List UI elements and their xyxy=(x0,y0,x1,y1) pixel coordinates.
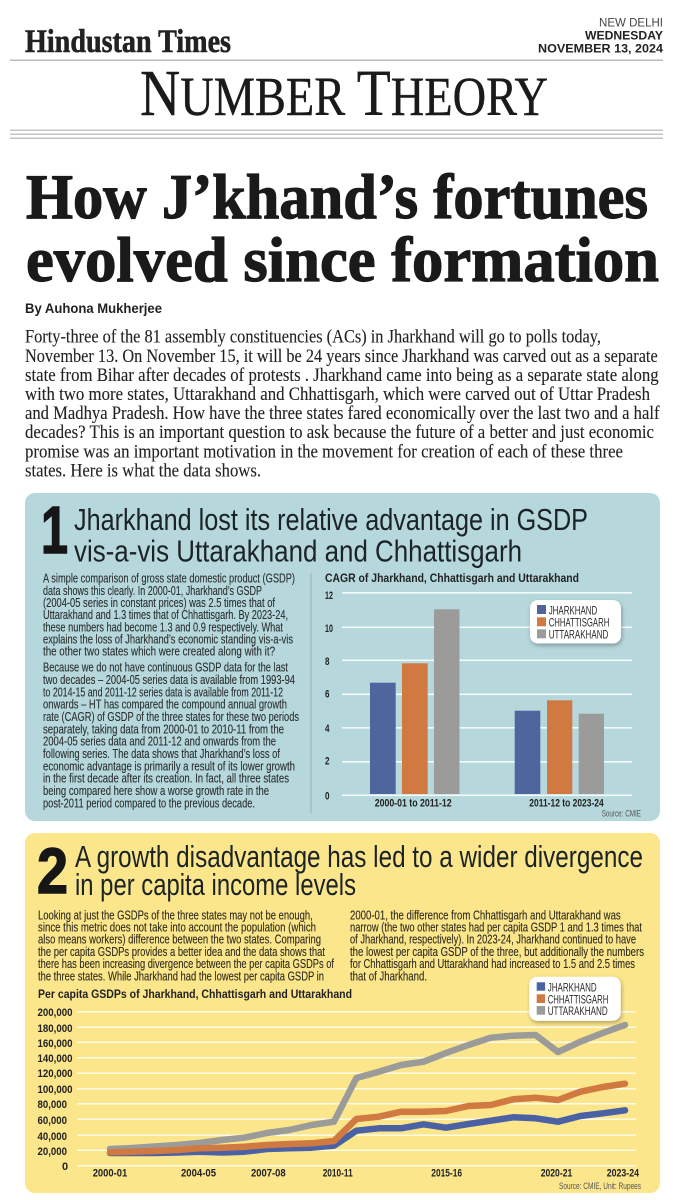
main headline xyxy=(26,161,659,295)
line chart: per capita GSDP xyxy=(38,977,641,1191)
y axis labels: 40,000 xyxy=(38,1131,67,1143)
y axis labels: 100,000 xyxy=(38,1084,72,1096)
panel 1 text: explains the loss of Jharkhand’s economic standing vis-a-vis xyxy=(43,633,293,647)
panel 1 text: Because we do not have continuous GSDP data for the last xyxy=(43,661,288,675)
panel 1 text: 2004-05 series data and 2011-12 and onwards from the xyxy=(43,735,276,749)
panel 2 text left: since this metric does not take into account the population (which xyxy=(38,920,316,934)
x axis labels: 2000-01 to 2011-12 xyxy=(375,798,452,810)
dateline: NOVEMBER 13, 2024 xyxy=(538,43,664,55)
panel 1 text: (2004-05 series in constant prices) was 2.5 times that of xyxy=(43,596,275,610)
panel 1 text: economic advantage is primarily a result of its lower growth xyxy=(43,759,295,773)
bars: 2000-01 to 2011-12 xyxy=(370,609,460,794)
y axis labels: 10 xyxy=(325,623,333,635)
x axis labels: 2023-24 xyxy=(607,1168,640,1180)
legend: UTTARAKHAND xyxy=(548,1004,608,1018)
dateline: WEDNESDAY xyxy=(585,30,663,42)
panel 2 text right xyxy=(350,908,644,983)
panel 1 text: A simple comparison of gross state domestic product (GSDP) xyxy=(43,572,295,586)
panel 2 text left: the per capita GSDPs provides a better idea and the data shows that xyxy=(38,945,325,959)
panel 1 heading: vis-a-vis Uttarakhand and Chhattisgarh xyxy=(74,534,522,569)
panel 1 text: being compared here show a worse growth rate in the xyxy=(43,784,269,798)
legend: CHHATTISGARH xyxy=(549,616,609,630)
panel 2 heading: in per capita income levels xyxy=(75,867,356,902)
y axis labels xyxy=(325,590,333,802)
intro text: promise was an important motivation in the movement for creation of each of these three xyxy=(25,442,623,462)
legend xyxy=(529,977,621,1021)
logo: Hindustan Times: Hindustan Times xyxy=(25,24,231,60)
x axis labels xyxy=(375,798,604,810)
panel 1 text: to 2014-15 and 2011-12 series data is available from 2011-12 xyxy=(43,685,283,699)
panel 1 text: post-2011 period compared to the previous decade. xyxy=(43,796,255,810)
panel 1 text: onwards – HT has compared the compound annual growth xyxy=(43,698,287,712)
panel 2 text left xyxy=(38,908,334,983)
intro text: states. Here is what the data shows. xyxy=(25,461,261,481)
y axis labels: 80,000 xyxy=(38,1099,67,1111)
y axis labels: 200,000 xyxy=(38,1007,72,1019)
x axis labels: 2010-11 xyxy=(323,1168,353,1180)
main headline: How J’khand’s fortunes xyxy=(26,161,648,232)
section title: Number Theory: NUMBER THEORY xyxy=(140,57,548,130)
panel 1 text xyxy=(43,572,299,810)
panel 1: GSDP xyxy=(25,493,660,821)
y axis labels xyxy=(38,1007,72,1173)
panel 1 text: the other two states which were created along with it? xyxy=(43,645,275,659)
numeral 2: 2 xyxy=(37,835,68,907)
panel 2 text left: also means workers) difference between the two states. Comparing xyxy=(38,933,321,947)
bars: 2011-12 to 2023-24 xyxy=(515,700,604,794)
source: Source: CMIE, Unit: Rupees xyxy=(559,1181,641,1191)
panel 1 heading xyxy=(74,502,588,569)
intro text: Forty-three of the 81 assembly constituencies (ACs) in Jharkhand will go to polls today, xyxy=(25,328,601,348)
legend: JHARKHAND xyxy=(549,603,598,617)
bar chart: CAGR xyxy=(325,573,641,819)
x axis labels: 2011-12 to 2023-24 xyxy=(529,798,604,810)
intro text xyxy=(25,328,660,481)
legend: CHHATTISGARH xyxy=(548,992,608,1006)
y axis labels: 8 xyxy=(325,656,330,668)
y axis labels: 4 xyxy=(325,723,330,735)
y axis labels: 2 xyxy=(325,756,330,768)
panel 1 text: rate (CAGR) of GSDP of the three states for these two periods xyxy=(43,710,299,724)
numeral 1: 1 xyxy=(41,493,68,568)
panel 1 text: two decades – 2004-05 series data is available from 1993-94 xyxy=(43,673,295,687)
y axis labels: 180,000 xyxy=(38,1023,72,1035)
panel 1 text: data shows this clearly. In 2000-01, Jharkhand’s GSDP xyxy=(43,584,262,598)
line chart title: Per capita GSDPs of Jharkhand, Chhattisgarh and Uttarakhand xyxy=(38,989,352,1001)
line: Jharkhand xyxy=(110,1110,625,1153)
dateline: NEW DELHI xyxy=(599,18,663,30)
bar chart title: CAGR of Jharkhand, Chhattisgarh and Uttarakhand xyxy=(325,573,579,585)
dateline xyxy=(538,18,664,55)
y axis labels: 12 xyxy=(325,590,333,602)
panel 1 background xyxy=(25,493,660,821)
main headline: evolved since formation xyxy=(26,224,659,295)
panel 1 text: separately, taking data from 2000-01 to 2010-11 from the xyxy=(43,722,284,736)
source: Source: CMIE xyxy=(602,809,641,819)
masthead xyxy=(25,18,664,60)
panel 2 text left: there has been increasing divergence between the per capita GSDPs of xyxy=(38,957,334,971)
byline: By Auhona Mukherjee xyxy=(25,300,162,316)
panel 2 background xyxy=(25,833,660,1193)
line: Chhattisgarh xyxy=(110,1084,625,1152)
y axis labels: 0 xyxy=(62,1161,68,1173)
y axis labels: 0 xyxy=(325,790,330,802)
x axis labels: 2000-01 xyxy=(93,1168,127,1180)
panel 2 text right: that of Jharkhand. xyxy=(350,969,427,983)
x axis labels xyxy=(93,1168,640,1180)
x axis labels: 2020-21 xyxy=(541,1168,572,1180)
y axis labels: 140,000 xyxy=(38,1053,72,1065)
panel 1 text: in the first decade after its creation. In fact, all three states xyxy=(43,772,289,786)
x axis labels: 2004-05 xyxy=(181,1168,216,1180)
y axis labels: 120,000 xyxy=(38,1068,72,1080)
legend: JHARKHAND xyxy=(548,981,597,995)
y axis labels: 20,000 xyxy=(38,1146,67,1158)
y axis labels: 6 xyxy=(325,688,330,700)
panel 2 text left: the three states. While Jharkhand had the lowest per capita GSDP in xyxy=(38,969,324,983)
panel 2 heading xyxy=(75,839,643,902)
x axis labels: 2007-08 xyxy=(251,1168,286,1180)
panel 2: per capita xyxy=(25,833,660,1193)
panel 1 text: following series. The data shows that Jharkhand’s loss of xyxy=(43,747,280,761)
panel 2 text left: Looking at just the GSDPs of the three states may not be enough, xyxy=(38,908,313,922)
panel 1 text: these numbers had become 1.3 and 0.9 respectively. What xyxy=(43,620,283,634)
panel 1 text: Uttarakhand and 1.3 times that of Chhattisgarh. By 2023-24, xyxy=(43,608,288,622)
legend xyxy=(530,600,621,644)
y axis labels: 160,000 xyxy=(38,1038,72,1050)
y axis labels: 60,000 xyxy=(38,1115,67,1127)
x axis labels: 2015-16 xyxy=(431,1168,462,1180)
legend: UTTARAKHAND xyxy=(549,628,609,642)
line: Uttarakhand xyxy=(110,1025,625,1149)
